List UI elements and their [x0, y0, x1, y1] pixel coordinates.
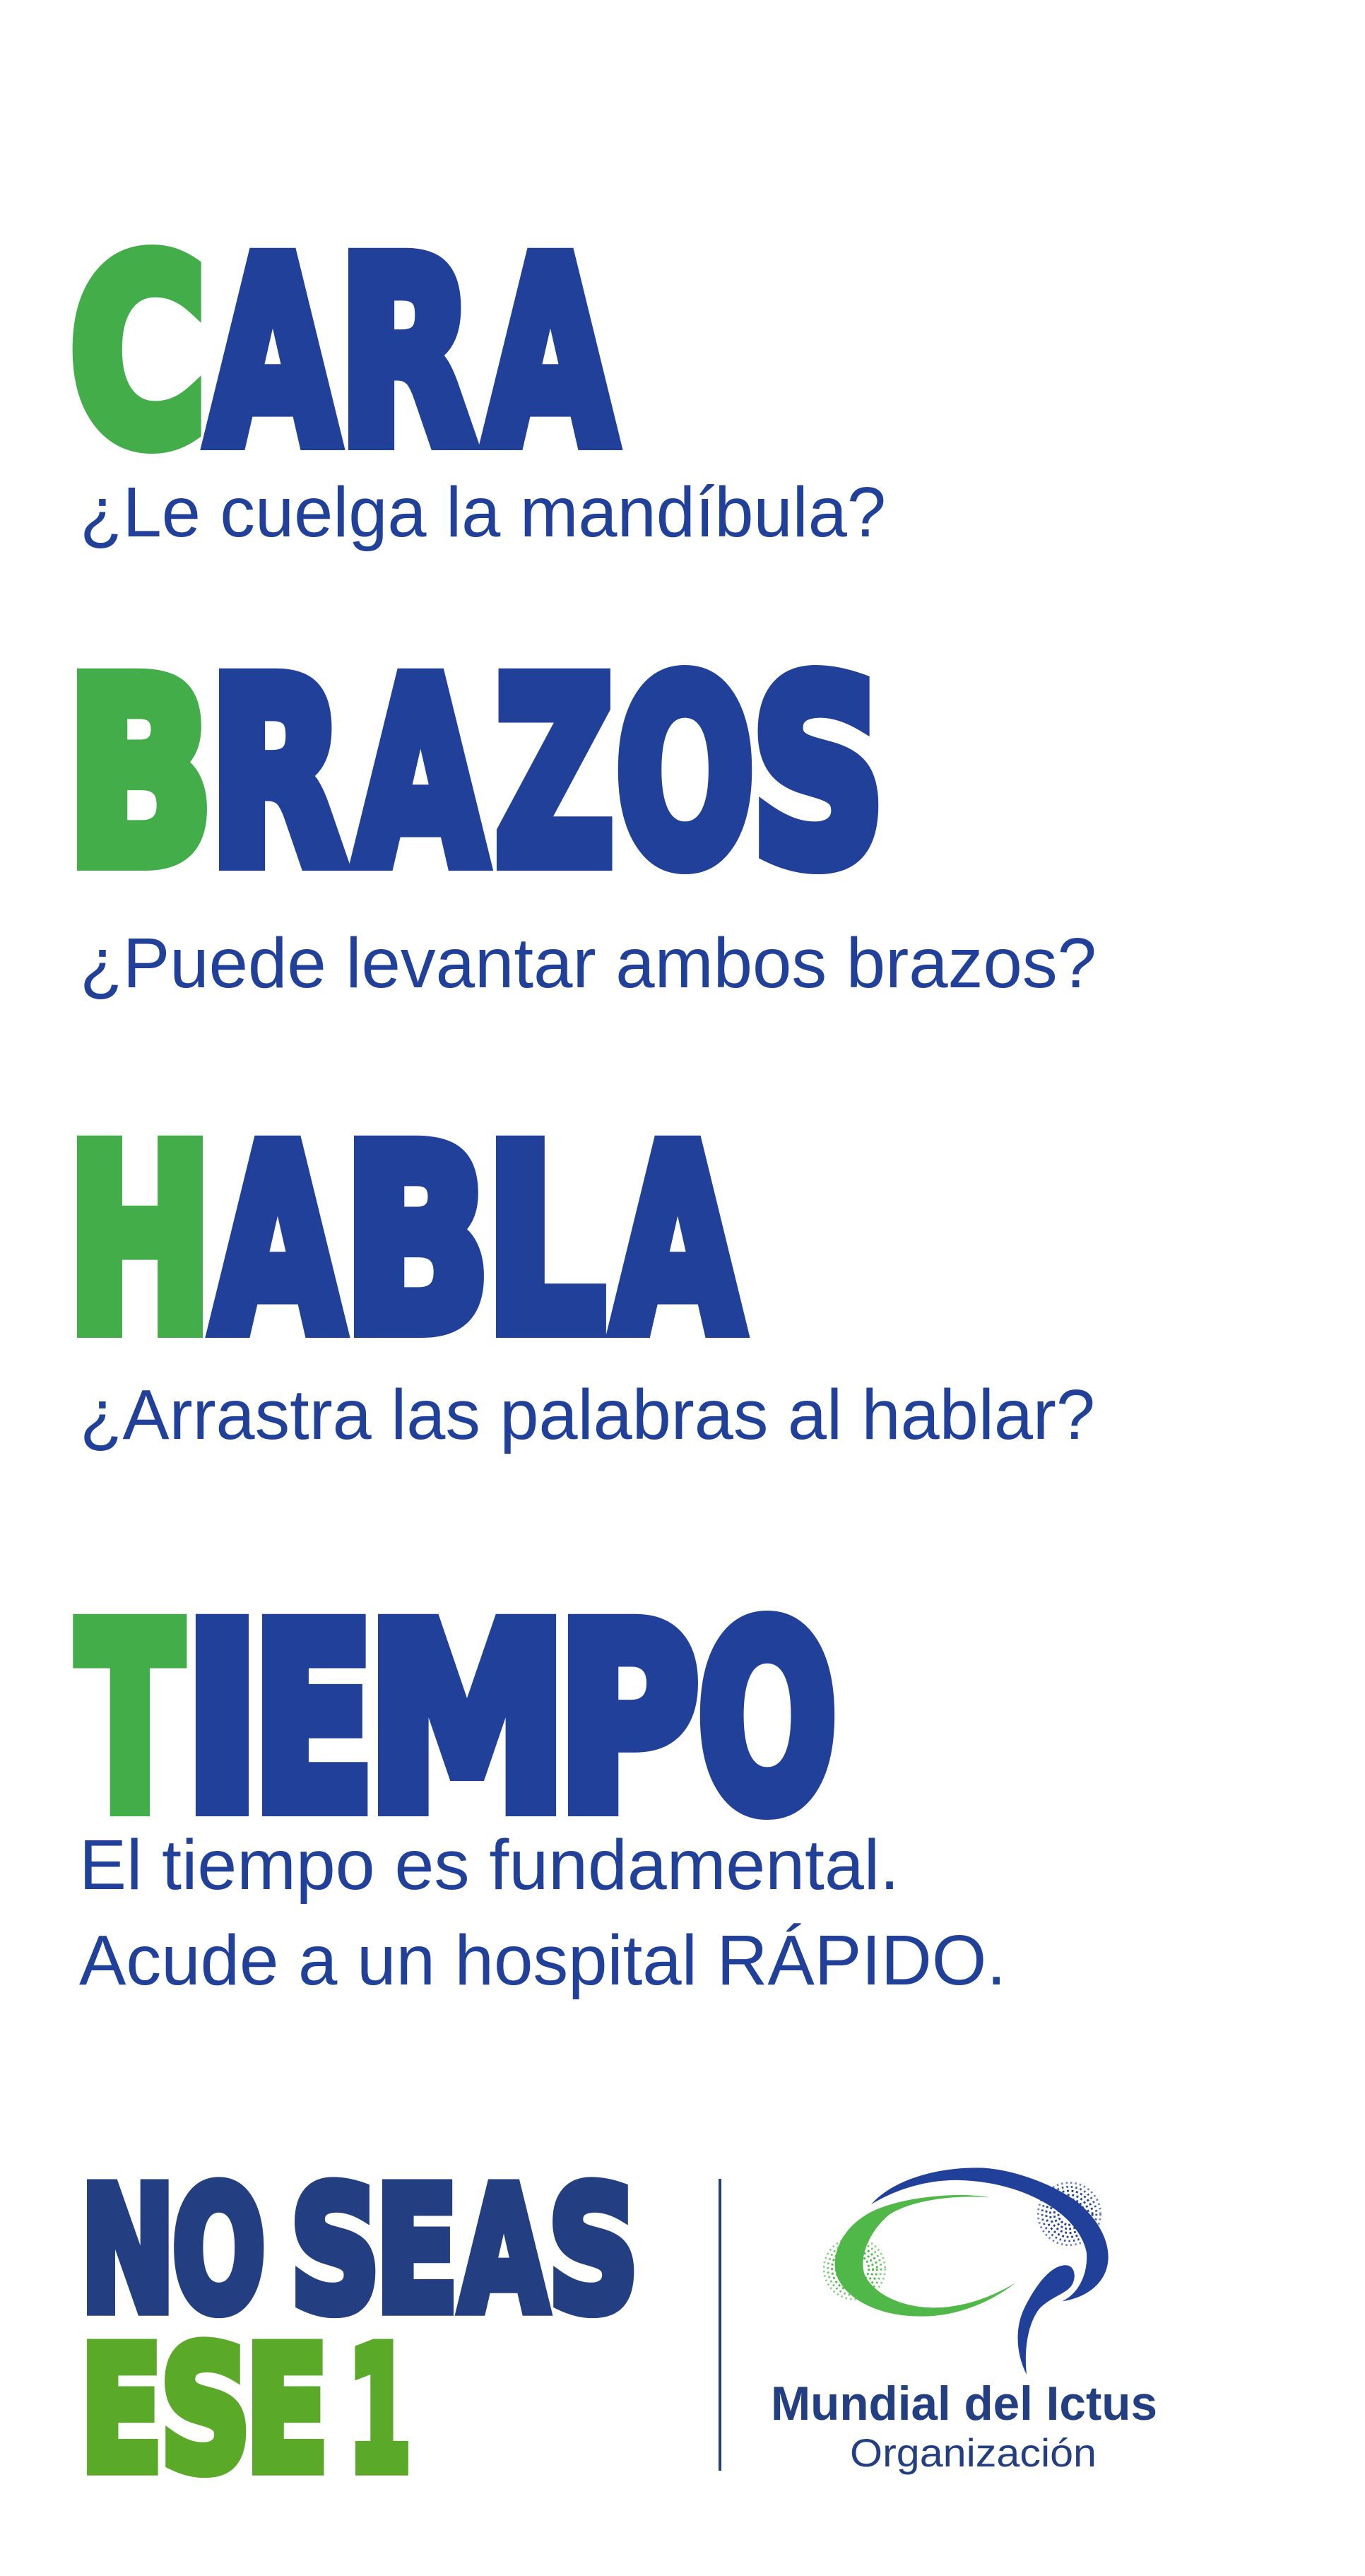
heading: HABLA: L [485, 1095, 605, 1389]
heading: CARA: A [208, 208, 338, 501]
slogan: ESE 1: E [81, 2312, 162, 2510]
slogan: ESE 1: E [246, 2312, 329, 2510]
heading: TIEMPO: T [78, 1573, 183, 1867]
heading: BRAZOS: A [356, 628, 487, 922]
logo: World Stroke Organization brain mark [824, 2168, 1109, 2375]
icon: blue upper arc [871, 2168, 1109, 2301]
text: cara question: ¿Le cuelga la mandíbula? [80, 473, 886, 552]
logo text: Organización: Organización [850, 2430, 1097, 2475]
heading: BRAZOS: B [66, 628, 213, 921]
heading: HABLA: H [67, 1095, 213, 1389]
heading: TIEMPO [78, 1573, 837, 1867]
text: habla question: ¿Arrastra las palabras al hablar? [80, 1375, 1095, 1454]
slogan: ESE 1: 1 [348, 2312, 411, 2510]
heading: CARA: A [486, 208, 616, 501]
slogan: NO SEAS: E [376, 2152, 458, 2351]
text: tiempo message: El tiempo es fundamental. [79, 1825, 899, 1905]
heading: HABLA: B [343, 1095, 490, 1388]
vertical divider [719, 2179, 721, 2471]
heading: BRAZOS: R [209, 628, 345, 922]
heading: TIEMPO: M [367, 1574, 567, 1867]
icon: blue halftone dots [1038, 2183, 1101, 2245]
slogan: NO SEAS: A [460, 2152, 548, 2351]
icon: green crescent [835, 2195, 1016, 2317]
slogan: ESE 1 [81, 2311, 411, 2510]
heading: BRAZOS: Z [495, 628, 613, 921]
slogan: NO SEAS: S [290, 2151, 380, 2350]
text: brazos question: ¿Puede levantar ambos brazos? [80, 924, 1097, 1003]
slogan: NO SEAS: N [81, 2152, 175, 2351]
heading: HABLA: A [613, 1095, 743, 1389]
heading: CARA [70, 207, 616, 501]
heading: CARA: C [70, 207, 206, 500]
slogan: NO SEAS [81, 2151, 639, 2351]
slogan: NO SEAS: O [172, 2151, 266, 2350]
heading: BRAZOS [66, 627, 885, 922]
logo text: Mundial del Ictus: Mundial del Ictus [771, 2377, 1157, 2430]
text: tiempo message [79, 1825, 1006, 2000]
icon: blue stem [1018, 2265, 1075, 2375]
heading: HABLA [67, 1095, 743, 1389]
slogan: ESE 1: S [160, 2311, 251, 2510]
heading: TIEMPO: O [698, 1573, 837, 1866]
heading: BRAZOS: O [616, 627, 754, 921]
heading: CARA: R [338, 207, 475, 501]
icon: green halftone dots [824, 2238, 885, 2299]
heading: TIEMPO: E [252, 1573, 374, 1866]
heading: TIEMPO: I [184, 1574, 260, 1867]
slogan: NO SEAS: S [548, 2151, 639, 2350]
text: tiempo message: Acude a un hospital RÁPIDO. [79, 1921, 1006, 2000]
heading: HABLA: A [213, 1095, 343, 1389]
heading: TIEMPO: P [557, 1573, 699, 1866]
heading: BRAZOS: S [751, 628, 885, 921]
